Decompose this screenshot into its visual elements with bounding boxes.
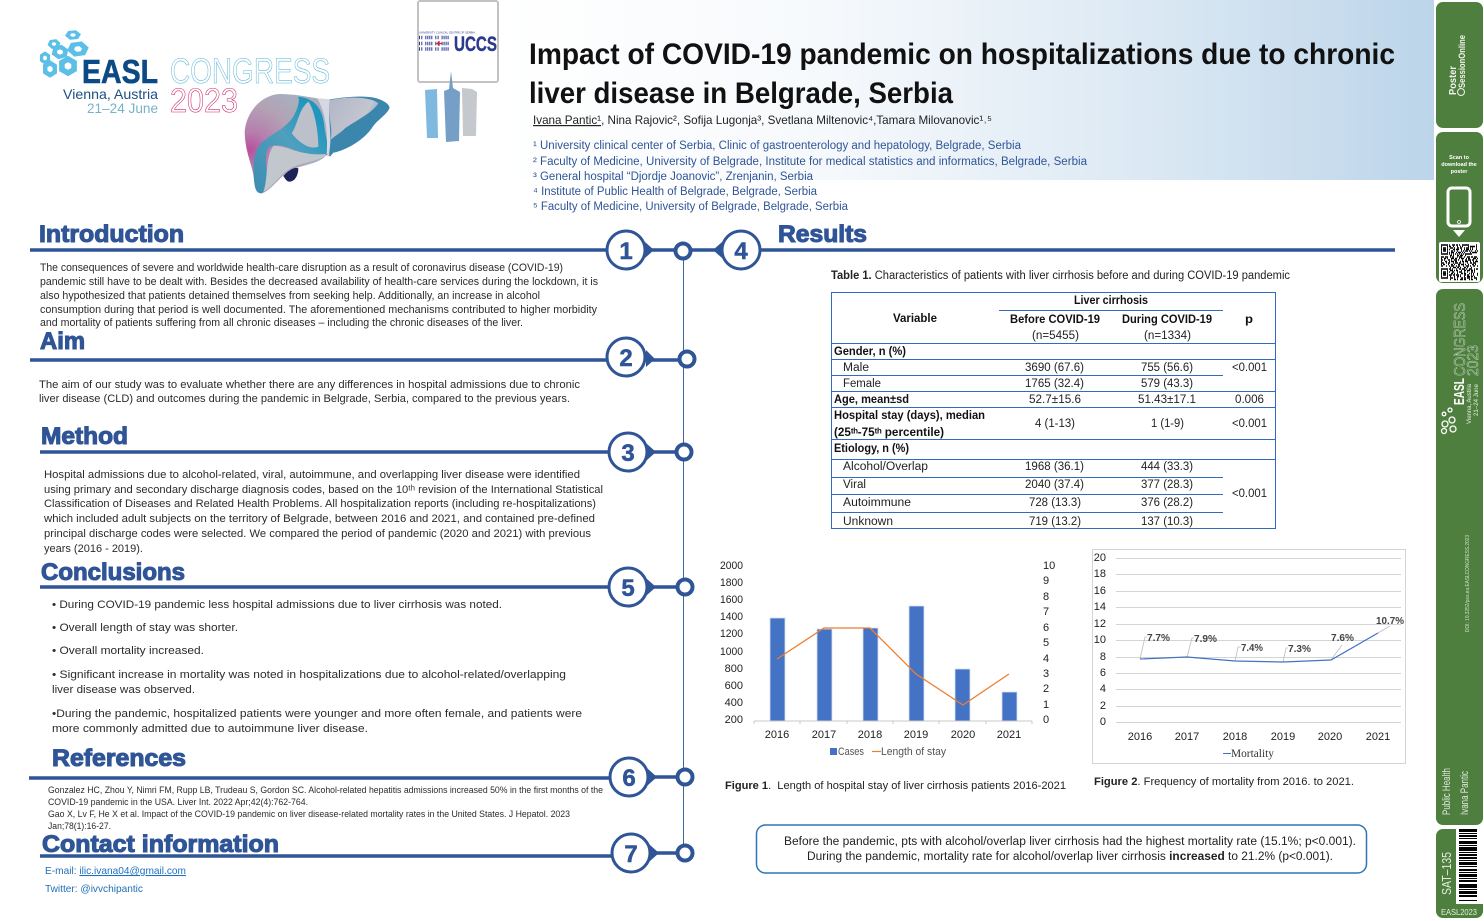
text: method: principal discharge codes were selected. We compared the period of pandemic (2020 and 2021) with previous xyxy=(44,528,591,540)
category labels xyxy=(765,729,1021,741)
marker 1: 1 xyxy=(619,238,633,265)
logo: UCCS: UCCS xyxy=(454,33,497,56)
y axis labels: 8 xyxy=(1100,651,1106,663)
figure 1 caption: Figure 1. Length of hospital stay of liver cirrhosis patients 2016-2021 xyxy=(725,780,1066,792)
heading: Results: Results xyxy=(778,221,867,248)
table: patient characteristics: 137 (10.3) xyxy=(1141,516,1193,528)
heading: Conclusions: Conclusions xyxy=(41,559,185,586)
text: conclusions: • Significant increase in mortality was noted in hospitalizations due to alcohol-related/overlapping xyxy=(52,669,566,681)
timeline connector xyxy=(29,250,1395,856)
sidebar panel: poster number and barcode xyxy=(1436,829,1483,918)
affiliations: ¹ University clinical center of Serbia, Clinic of gastroenterology and hepatology, Belgrade, Serbia xyxy=(533,140,1022,152)
text: conclusions: • Overall mortality increased. xyxy=(52,645,204,657)
text: introduction: pandemic still have to be dealt with. Besides the decreased availability of health-care services during the lockdown, it is xyxy=(40,276,598,288)
sidebar panel: EASL Congress: Public Health xyxy=(1441,768,1453,815)
y axis labels: 10 xyxy=(1094,634,1106,646)
table: patient characteristics: Unknown xyxy=(843,516,893,528)
category labels: 2016 xyxy=(765,729,789,741)
left axis labels: 200 xyxy=(725,714,743,726)
table: patient characteristics: (25ᵗʰ-75ᵗʰ percentile) xyxy=(834,427,944,439)
table: patient characteristics: (n=5455) xyxy=(1032,330,1079,342)
left axis labels: 400 xyxy=(725,697,743,709)
text: contact details xyxy=(45,865,186,895)
text: introduction: and mortality of patients suffering from all chronic diseases – including the chronic diseases of the liver. xyxy=(40,317,523,329)
marker 2 xyxy=(607,338,694,376)
left axis labels xyxy=(720,560,743,726)
logo: EASL Congress: 21–24 June xyxy=(87,100,158,116)
text: references: COVID-19 pandemic in the USA. Liver Int. 2022 Apr;42(4):762-764. xyxy=(48,797,308,807)
category labels: 2021 xyxy=(1366,731,1390,743)
marker 5 xyxy=(609,568,692,606)
table: patient characteristics: 2040 (37.4) xyxy=(1025,479,1084,491)
heading: Aim: Aim xyxy=(40,328,85,355)
table: patient characteristics: 52.7±15.6 xyxy=(1029,394,1081,406)
affiliations: ³ General hospital “Djordje Joanovic”, Zrenjanin, Serbia xyxy=(533,171,814,183)
table: patient characteristics: 579 (43.3) xyxy=(1141,378,1193,390)
y axis labels: 4 xyxy=(1100,683,1106,695)
y axis labels xyxy=(1094,552,1106,728)
table: patient characteristics: During COVID-19 xyxy=(1122,314,1212,326)
text: aim: The aim of our study was to evaluate whether there are any differences in hospital admissions due to chronic xyxy=(39,379,581,391)
sidebar panel: scan QR: download the xyxy=(1441,162,1477,168)
sidebar panel: scan QR xyxy=(1436,132,1483,283)
legend: Length of stay xyxy=(881,746,946,758)
text: method: Hospital admissions due to alcohol-related, viral, autoimmune, and overlapping liver disease were identified xyxy=(44,469,580,481)
authors: Ivana Pantic¹, Nina Rajovic², Sofija Lugonja³, Svetlana Miltenovic⁴,Tamara Milovanovic¹˒⁵ xyxy=(533,113,992,127)
right axis labels: 10 xyxy=(1043,560,1055,572)
left axis labels: 1000 xyxy=(720,646,743,658)
table: patient characteristics: <0.001 xyxy=(1232,418,1267,430)
left axis labels: 1400 xyxy=(720,611,743,623)
table: patient characteristics: Male xyxy=(843,362,869,374)
text: references: Jan;78(1):16-27. xyxy=(48,821,111,831)
affiliations: ⁴ Institute of Public Health of Belgrade, Belgrade, Serbia xyxy=(533,186,818,198)
category labels: 2017 xyxy=(1175,731,1199,743)
table: patient characteristics xyxy=(831,292,1276,528)
table: patient characteristics: 719 (13.2) xyxy=(1029,516,1081,528)
table: patient characteristics: 0.006 xyxy=(1235,394,1264,406)
category labels: 2018 xyxy=(1223,731,1247,743)
left axis labels: 1200 xyxy=(720,628,743,640)
marker 4 xyxy=(713,231,760,269)
marker 6 xyxy=(610,758,692,796)
table: patient characteristics: Etiology, n (%) xyxy=(834,443,909,455)
category labels: 2016 xyxy=(1128,731,1152,743)
sidebar panel: poster session online: Poster xyxy=(1448,66,1459,95)
text: conclusions: more commonly admitted due to autoimmune liver disease. xyxy=(52,723,368,735)
illustration: liver xyxy=(245,94,389,193)
table: patient characteristics: 377 (28.3) xyxy=(1141,479,1193,491)
text: introduction: consumption during that period is well documented. The aforementioned mechanisms contributed to higher morbidity xyxy=(40,304,597,316)
table: patient characteristics: 376 (28.2) xyxy=(1141,497,1193,509)
y axis labels: 2 xyxy=(1100,700,1106,712)
table: patient characteristics: Viral xyxy=(843,479,866,491)
logo: UCCS: UNIVERSITY CLINICAL CENTRE OF SERBIA xyxy=(419,30,475,34)
logo: EASL Congress xyxy=(40,31,330,120)
category labels xyxy=(1128,731,1390,743)
y axis labels: 16 xyxy=(1094,585,1106,597)
text: contact details: E-mail: ilic.ivana04@gmail.com xyxy=(45,865,186,877)
sidebar panel: poster session online: SessionOnline xyxy=(1457,35,1468,88)
sidebar panel: EASL Congress: EASL xyxy=(1451,378,1468,405)
logo: EASL Congress: EASL xyxy=(82,53,158,90)
right axis labels: 2 xyxy=(1043,683,1049,695)
category labels: 2017 xyxy=(812,729,836,741)
data labels xyxy=(1147,615,1405,655)
affiliations: ² Faculty of Medicine, University of Belgrade, Institute for medical statistics and informatics, Belgrade, Serbia xyxy=(533,156,1088,168)
text: introduction: The consequences of severe and worldwide health-care disruption as a result of coronavirus disease (COVID-19) xyxy=(40,262,563,274)
table: patient characteristics: Age, mean±sd xyxy=(834,394,909,406)
chart: cases and length of stay xyxy=(720,560,1055,758)
category labels: 2021 xyxy=(997,729,1021,741)
left axis labels: 1600 xyxy=(720,594,743,606)
data labels: 10.7% xyxy=(1376,615,1405,627)
text: method: Classification of Diseases and Related Health Problems. All hospitalization reports (including re-hospitalizations) xyxy=(44,498,596,510)
table: patient characteristics: p xyxy=(1245,314,1253,326)
table: patient characteristics: Liver cirrhosis xyxy=(1074,295,1148,307)
right axis labels: 8 xyxy=(1043,591,1049,603)
sidebar panel: EASL Congress: 2023 xyxy=(1465,345,1482,376)
logo: EASL Congress: 2023 xyxy=(170,82,238,120)
affiliations xyxy=(533,140,1088,213)
left axis labels: 2000 xyxy=(720,560,743,572)
table: patient characteristics: Before COVID-19 xyxy=(1010,314,1100,326)
marker 4: 4 xyxy=(734,238,748,265)
sidebar panel: poster session online xyxy=(1436,2,1483,128)
title: liver disease in Belgrade, Serbia xyxy=(529,77,953,110)
marker 3: 3 xyxy=(621,440,635,467)
heading: References: References xyxy=(52,745,186,772)
text: aim xyxy=(39,379,581,405)
data labels: 7.6% xyxy=(1331,632,1355,644)
table: patient characteristics: Alcohol/Overlap xyxy=(843,461,928,473)
table: patient characteristics: 1765 (32.4) xyxy=(1025,378,1084,390)
text: conclusions: • Overall length of stay was shorter. xyxy=(52,622,238,634)
text: references: Gonzalez HC, Zhou Y, Nimri FM, Rupp LB, Trudeau S, Gordon SC. Alcohol-related hepatitis admissions increased 50% in the first months of the xyxy=(48,785,603,795)
barcode xyxy=(1459,829,1477,902)
sidebar panel: scan QR: poster xyxy=(1451,169,1468,175)
y axis labels: 12 xyxy=(1094,618,1106,630)
logo: EASL Congress: CONGRESS xyxy=(170,52,330,91)
data labels: 7.9% xyxy=(1194,633,1218,645)
right axis labels xyxy=(1043,560,1055,726)
callout: Before the pandemic, pts with alcohol/overlap liver cirrhosis had the highest mortality rate (15.1%; p<0.001). xyxy=(784,836,1356,848)
heading: Introduction: Introduction xyxy=(39,221,184,248)
text: references xyxy=(48,785,603,831)
right axis labels: 0 xyxy=(1043,714,1049,726)
title xyxy=(529,38,1395,110)
leader lines xyxy=(1140,626,1390,662)
y axis labels: 14 xyxy=(1094,601,1106,613)
table: patient characteristics: 3690 (67.6) xyxy=(1025,362,1084,374)
sidebar panel: scan QR: Scan to xyxy=(1449,155,1470,161)
category labels: 2020 xyxy=(951,729,975,741)
table: patient characteristics: 51.43±17.1 xyxy=(1138,394,1196,406)
sidebar panel: EASL Congress xyxy=(1436,289,1483,825)
text: introduction: also hypothesized that patients detained themselves from seeking help. Additionally, an increase in alcohol xyxy=(40,290,540,302)
heading: Method: Method xyxy=(41,423,128,450)
table: patient characteristics: 4 (1-13) xyxy=(1035,418,1075,430)
table: patient characteristics: <0.001 xyxy=(1232,488,1267,500)
sidebar panel: EASL Congress: CONGRESS xyxy=(1452,303,1469,376)
category labels: 2019 xyxy=(1271,731,1295,743)
text: conclusions: •During the pandemic, hospitalized patients were younger and more often female, and patients were xyxy=(52,708,582,720)
legend xyxy=(830,746,946,758)
marker 7: 7 xyxy=(624,841,638,868)
marker 6: 6 xyxy=(622,765,636,792)
sidebar panel: EASL Congress: 21–24 June xyxy=(1474,383,1480,416)
right axis labels: 5 xyxy=(1043,637,1049,649)
sidebar panel: EASL Congress: Ivana Pantic xyxy=(1459,771,1471,815)
text: method: using primary and secondary discharge diagnosis codes, based on the 10ᵗʰ revision of the International Statistical xyxy=(44,484,603,496)
line: mortality xyxy=(1140,633,1378,662)
data labels: 7.3% xyxy=(1288,643,1312,655)
data labels: 7.4% xyxy=(1241,642,1264,654)
table: patient characteristics: Hospital stay (days), median xyxy=(834,410,985,422)
table: patient characteristics: Variable xyxy=(893,313,937,325)
left axis labels: 600 xyxy=(725,680,743,692)
logo: EASL Congress: Vienna, Austria xyxy=(63,86,158,102)
y axis labels: 6 xyxy=(1100,667,1106,679)
right axis labels: 6 xyxy=(1043,622,1049,634)
callout: During the pandemic, mortality rate for alcohol/overlap liver cirrhosis increased to 21.2% (p<0.001). xyxy=(807,851,1333,863)
figure 2 caption: Figure 2. Frequency of mortality from 2016. to 2021. xyxy=(1094,776,1354,788)
text: method: years (2016 - 2019). xyxy=(44,543,143,555)
right axis labels: 4 xyxy=(1043,653,1049,665)
marker 5: 5 xyxy=(621,575,635,602)
left axis labels: 800 xyxy=(725,663,743,675)
table: patient characteristics: <0.001 xyxy=(1232,362,1267,374)
table caption: Table 1. Characteristics of patients with liver cirrhosis before and during COVID-19 pandemic xyxy=(831,270,1290,282)
QR code xyxy=(1439,242,1480,282)
callout xyxy=(756,825,1366,873)
sidebar panel: poster number and barcode: SAT–135 xyxy=(1439,852,1454,895)
category labels: 2019 xyxy=(904,729,928,741)
category labels: 2018 xyxy=(858,729,882,741)
text: introduction xyxy=(40,262,598,329)
icon: phone xyxy=(1448,188,1470,226)
chart: mortality xyxy=(1092,550,1406,764)
affiliations: ⁵ Faculty of Medicine, University of Belgrade, Belgrade, Serbia xyxy=(533,201,849,213)
legend: Mortality xyxy=(1231,748,1274,760)
title: Impact of COVID-19 pandemic on hospitalizations due to chronic xyxy=(529,38,1395,71)
icon: hexagons xyxy=(1442,408,1456,434)
table: patient characteristics: 755 (56.6) xyxy=(1141,362,1193,374)
table: patient characteristics: Gender, n (%) xyxy=(834,346,906,358)
sidebar panel: poster number and barcode: EASL2023 xyxy=(1441,908,1478,917)
data labels: 7.7% xyxy=(1147,632,1171,644)
table: patient characteristics: 444 (33.3) xyxy=(1141,461,1193,473)
left axis labels: 1800 xyxy=(720,577,743,589)
y axis labels: 18 xyxy=(1094,568,1106,580)
right axis labels: 1 xyxy=(1043,699,1049,711)
text: conclusions: liver disease was observed. xyxy=(52,684,195,696)
heading: Contact information: Contact information xyxy=(42,831,279,858)
text: method xyxy=(43,469,603,555)
marker 3 xyxy=(609,433,692,471)
marker 7 xyxy=(612,834,692,872)
text: references: Gao X, Lv F, He X et al. Impact of the COVID-19 pandemic on liver disease-related mortality rates in the United States. J Hepatol. 2023 xyxy=(48,809,570,819)
bars: cases xyxy=(770,606,1017,721)
text: aim: liver disease (CLD) and outcomes during the pandemic in Belgrade, Serbia, compared to the previous years. xyxy=(39,393,570,405)
table: patient characteristics: Female xyxy=(843,378,881,390)
category labels: 2020 xyxy=(1318,731,1342,743)
table: patient characteristics: 1 (1-9) xyxy=(1151,418,1184,430)
table: patient characteristics: Autoimmune xyxy=(843,497,911,509)
header background xyxy=(500,0,1434,180)
text: method: which included adult subjects on the territory of Belgrade, between 2016 and 2021, and contained pre-defined xyxy=(43,513,595,525)
sidebar panel: EASL Congress: Vienna, Austria xyxy=(1467,383,1473,424)
text: conclusions xyxy=(52,599,582,735)
legend: Cases xyxy=(838,746,864,758)
table: patient characteristics: (n=1334) xyxy=(1144,330,1191,342)
text: conclusions: • During COVID-19 pandemic less hospital admissions due to liver cirrhosis was noted. xyxy=(52,599,502,611)
marker 2: 2 xyxy=(619,345,633,372)
right axis labels: 7 xyxy=(1043,606,1049,618)
right axis labels: 3 xyxy=(1043,668,1049,680)
line: length of stay xyxy=(777,628,1009,705)
table: patient characteristics: 1968 (36.1) xyxy=(1025,461,1084,473)
right axis labels: 9 xyxy=(1043,575,1049,587)
y axis labels: 0 xyxy=(1100,716,1106,728)
table: patient characteristics: 728 (13.3) xyxy=(1029,497,1081,509)
marker 1 xyxy=(607,231,690,269)
sidebar panel: EASL Congress: DOI: 10.3252/pso.eu.EASLCONGRESS.2023 xyxy=(1465,535,1471,632)
text: contact details: Twitter: @ivvchipantic xyxy=(45,883,143,895)
icon: arrow down xyxy=(1453,230,1465,237)
y axis labels: 20 xyxy=(1094,552,1106,564)
logo: UCCS xyxy=(418,1,498,142)
